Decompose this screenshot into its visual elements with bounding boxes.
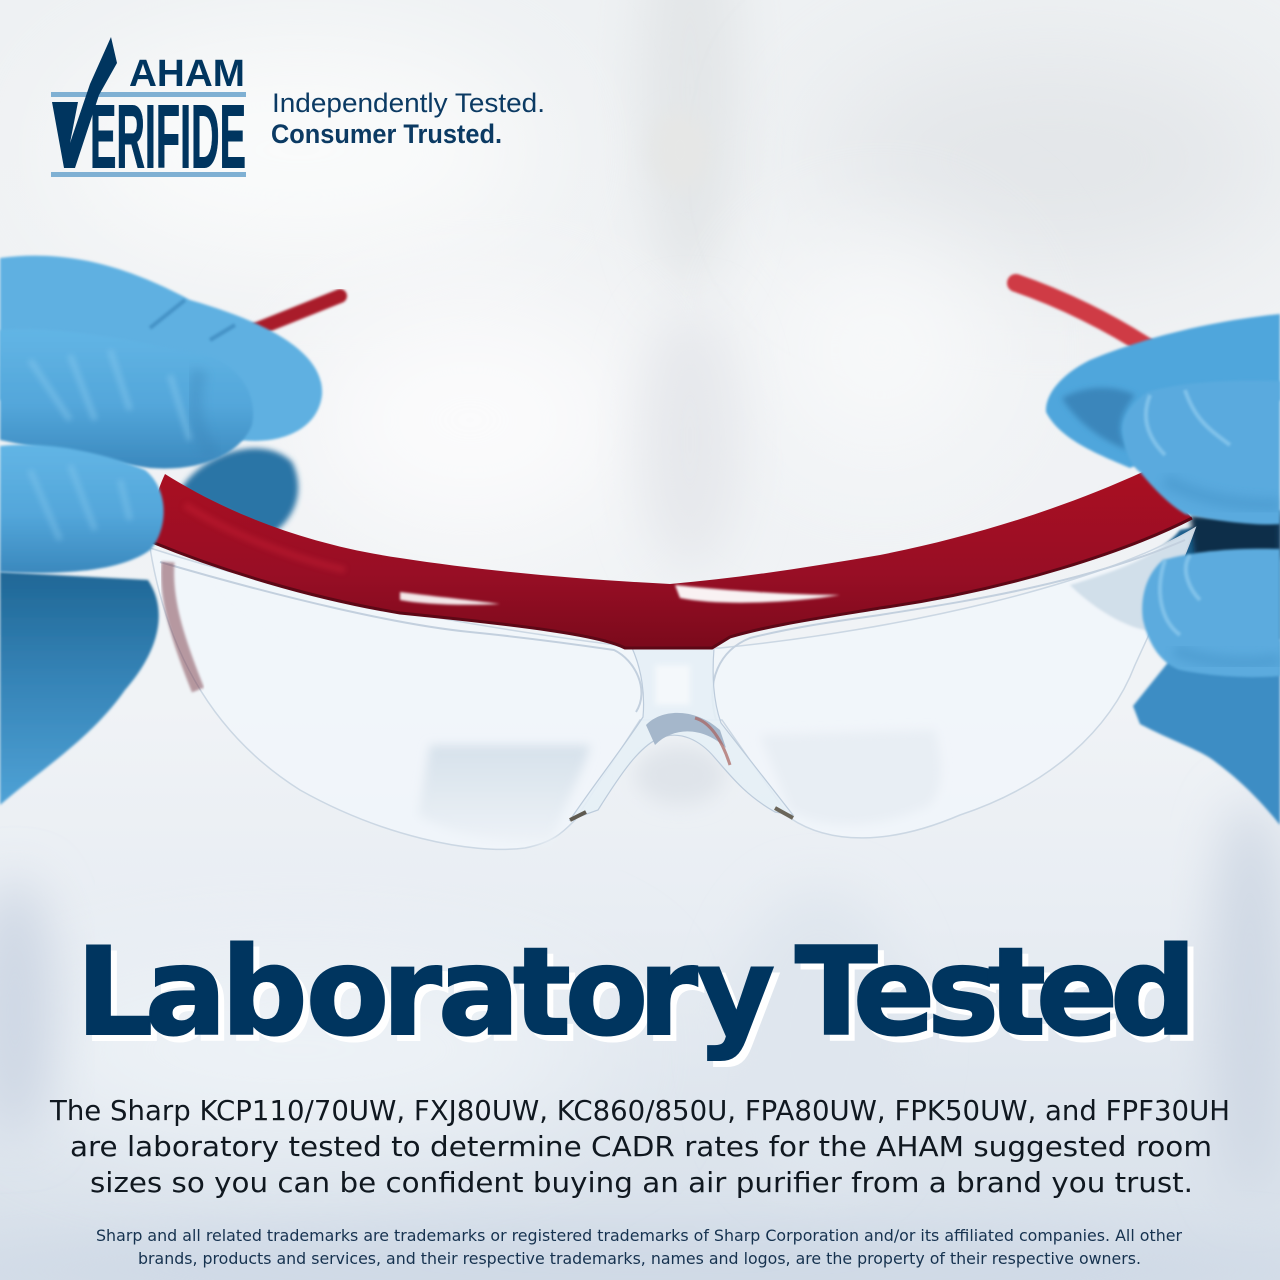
tagline — [271, 88, 545, 149]
body text: sizes so you can be confident buying an air purifier from a brand you trust. — [90, 1166, 1193, 1199]
footnote — [96, 1226, 1182, 1268]
thumb finger — [0, 445, 164, 573]
icon: AHAM Verifide logo — [51, 37, 246, 188]
index finger — [1122, 381, 1280, 525]
back finger — [1046, 314, 1280, 468]
right hand dark gap — [1190, 515, 1280, 560]
tagline: Independently Tested. — [272, 88, 545, 118]
body text: are laboratory tested to determine CADR rates for the AHAM suggested room — [70, 1130, 1212, 1163]
left glove — [0, 256, 322, 805]
footnote: Sharp and all related trademarks are trademarks or registered trademarks of Sharp Corporation and/or its affiliated companies. All other — [96, 1226, 1182, 1245]
index finger — [0, 329, 253, 469]
footnote: brands, products and services, and their respective trademarks, names and logos, are the property of their respective owners. — [138, 1249, 1141, 1268]
body text: The Sharp KCP110/70UW, FXJ80UW, KC860/850U, FPA80UW, FPK50UW, and FPF30UH — [49, 1094, 1230, 1127]
icon: AHAM Verifide logo: AHAM — [129, 53, 245, 95]
glasses frame: red band — [152, 470, 1192, 648]
tagline: Consumer Trusted. — [271, 119, 502, 149]
heading: Laboratory Tested: Laboratory Tested — [76, 922, 1197, 1063]
nose bridge and pads — [570, 645, 793, 820]
temple arm: left — [255, 296, 340, 330]
right hand dark gap and shadow — [1070, 510, 1280, 640]
body text — [49, 1094, 1230, 1199]
text: ERIFIDE — [90, 88, 246, 188]
glove wrinkles — [30, 300, 235, 540]
lens: left and right — [150, 528, 1195, 849]
back finger — [0, 256, 322, 441]
lower hand — [1133, 640, 1280, 825]
glove wrinkles — [1146, 390, 1280, 663]
temple arm: right — [1016, 283, 1155, 352]
lower hand — [0, 572, 159, 805]
back finger fold — [1062, 388, 1135, 450]
heading: Laboratory Tested: Laboratory Tested — [82, 928, 1203, 1069]
right glove — [1046, 314, 1280, 825]
left hand rear finger shadow — [180, 448, 298, 535]
middle finger — [1142, 549, 1280, 677]
